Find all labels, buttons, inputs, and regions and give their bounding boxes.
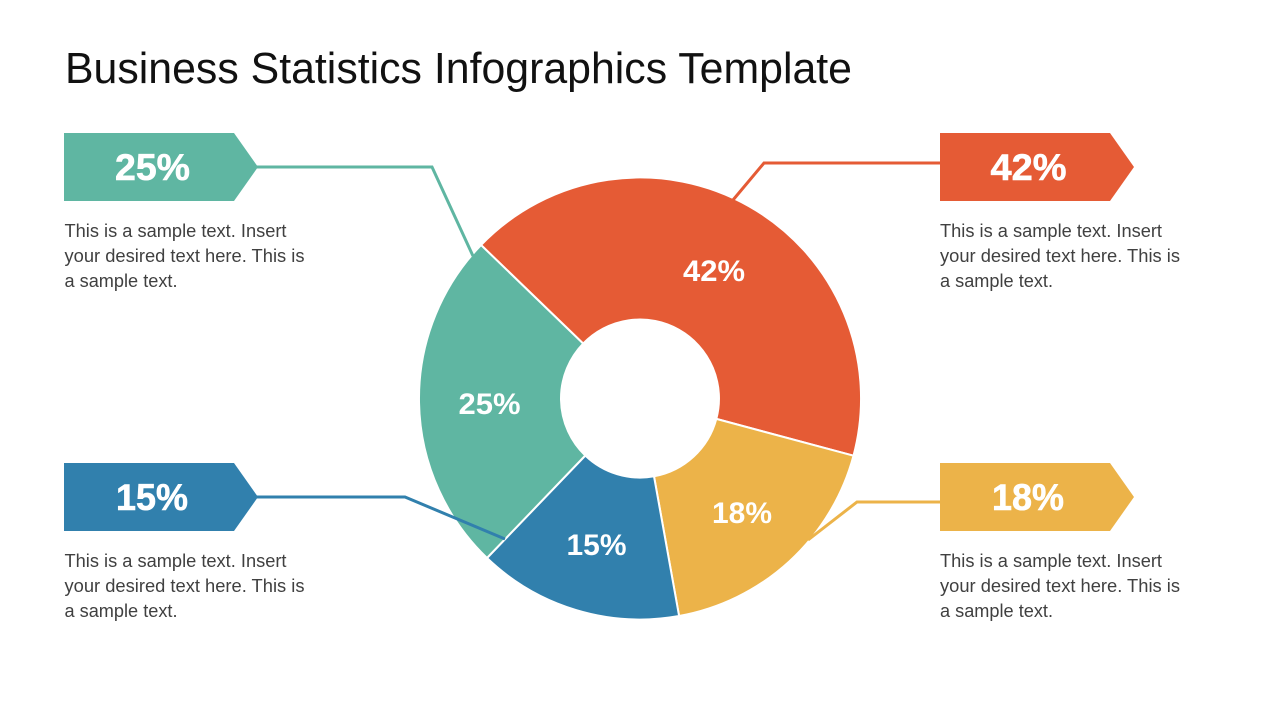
- segment: green 25%: [419, 245, 585, 558]
- text block: a sample text.: [64, 601, 178, 621]
- connector: orange: [733, 163, 941, 200]
- text block: a sample text.: [940, 271, 1053, 291]
- text block: your desired text here. This is: [64, 576, 304, 596]
- badge: 18%: [940, 463, 1134, 531]
- text block: a sample text.: [64, 271, 178, 291]
- text block: [64, 221, 304, 291]
- panel: blue 15%: [64, 463, 304, 621]
- text block: your desired text here. This is: [940, 576, 1180, 596]
- text block: [940, 551, 1180, 621]
- connector: blue: [256, 497, 505, 539]
- badge: 15%: 15%: [116, 477, 188, 518]
- donut label: 42%: 42%: [683, 255, 745, 288]
- connector: yellow: [808, 502, 941, 540]
- title: Business Statistics Infographics Template: [65, 44, 852, 93]
- donut label: 15%: 15%: [566, 529, 626, 562]
- badge: 15%: [64, 463, 258, 531]
- panel: orange 42%: [940, 133, 1180, 291]
- text block: [940, 221, 1180, 291]
- donut chart: [419, 177, 861, 619]
- panel: green 25%: [64, 133, 304, 291]
- donut label: 18%: 18%: [712, 497, 772, 530]
- text block: [64, 551, 304, 621]
- panel: yellow 18%: [940, 463, 1180, 621]
- text block: your desired text here. This is: [940, 246, 1180, 266]
- connector: green: [256, 167, 473, 256]
- badge: 18%: 18%: [992, 477, 1064, 518]
- badge: 25%: [64, 133, 258, 201]
- text block: This is a sample text. Insert: [940, 221, 1162, 241]
- donut label: 25%: 25%: [458, 388, 520, 421]
- text block: This is a sample text. Insert: [64, 551, 286, 571]
- segment: blue 15%: [487, 456, 679, 619]
- text block: a sample text.: [940, 601, 1053, 621]
- segment: yellow 18%: [654, 419, 854, 616]
- badge: 25%: 25%: [115, 147, 190, 188]
- badge: 42%: 42%: [990, 147, 1066, 188]
- text block: your desired text here. This is: [64, 246, 304, 266]
- text block: This is a sample text. Insert: [940, 551, 1162, 571]
- badge: 42%: [940, 133, 1134, 201]
- text block: This is a sample text. Insert: [64, 221, 286, 241]
- segment: orange 42%: [481, 177, 861, 456]
